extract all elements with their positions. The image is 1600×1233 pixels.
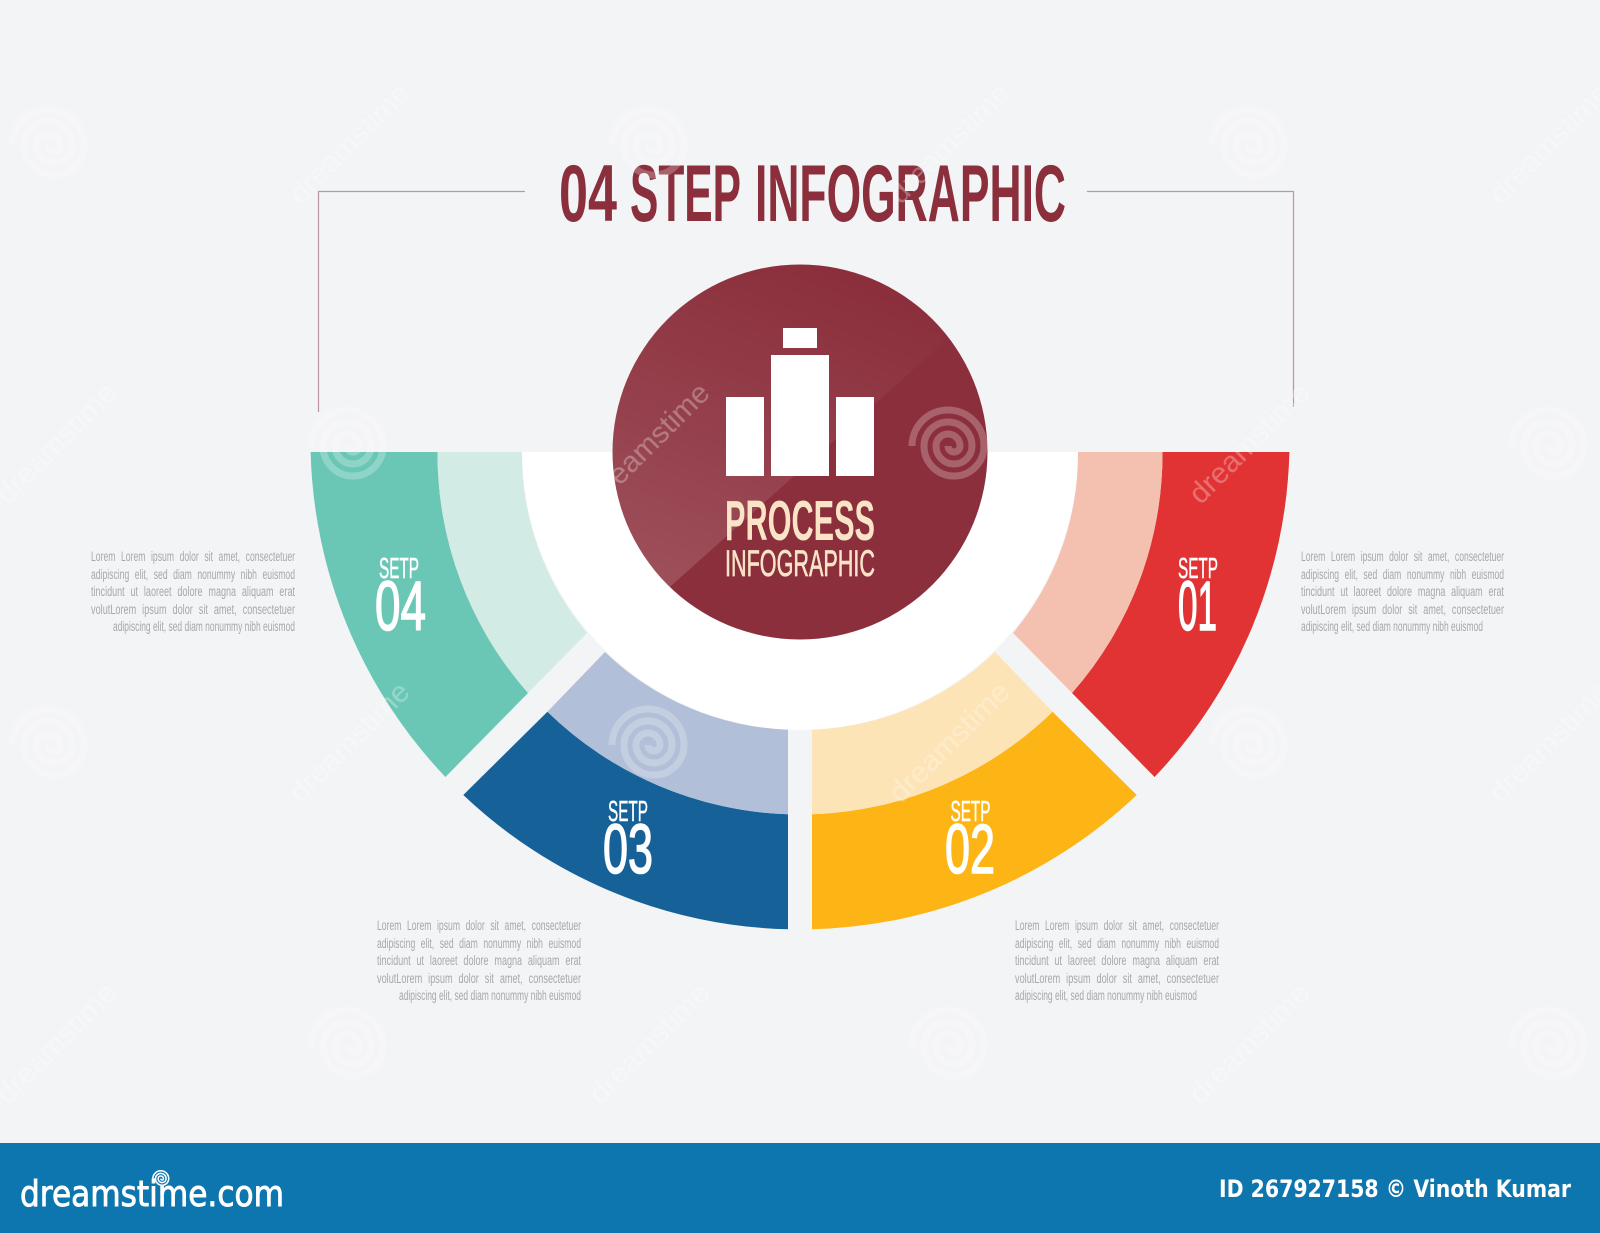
label: step 03 [603, 796, 653, 888]
footer logo spiral [153, 1171, 169, 1185]
text block: step 04: Lorem Lorem ipsum dolor sit amet, consectetuer [91, 549, 295, 564]
segment: step 01 red [1013, 452, 1289, 777]
watermark text: dreamstime [1182, 376, 1316, 510]
white inner half disc [522, 452, 1078, 730]
text block: step 01 [1301, 549, 1504, 634]
watermark text: dreamstime [582, 976, 716, 1110]
text block: step 01: volutLorem ipsum dolor sit amet, consectetuer [1301, 602, 1504, 617]
text block: step 01: tincidunt ut laoreet dolore magna aliquam erat [1301, 584, 1504, 599]
title [559, 149, 1066, 239]
title: STEP [630, 149, 741, 239]
watermark text: dreamstime [882, 675, 1016, 809]
segment: step 03 blue [463, 652, 788, 929]
text block: step 01: adipiscing elit, sed diam nonummy nibh euismod [1301, 619, 1483, 634]
footer logo: dreamstime.com [20, 1174, 284, 1215]
text block: step 03: adipiscing elit, sed diam nonummy nibh euismod [399, 988, 581, 1003]
icon: bar chart podium [726, 328, 874, 476]
title: INFOGRAPHIC [755, 149, 1066, 239]
text block: step 04: volutLorem ipsum dolor sit amet, consectetuer [91, 602, 295, 617]
text block: step 02: adipiscing elit, sed diam nonummy nibh euismod [1015, 988, 1197, 1003]
watermark text: dreamstime [282, 675, 416, 809]
watermark text: dreamstime [582, 376, 716, 510]
label: step 02: 02 [945, 810, 995, 888]
label: step 04 [375, 553, 426, 645]
label: step 04: 04 [375, 567, 426, 645]
text block: step 04: tincidunt ut laoreet dolore magna aliquam erat [91, 584, 295, 599]
label: step 02 [945, 796, 995, 888]
text block: step 03 [377, 918, 581, 1003]
watermark text: dreamstime [282, 76, 416, 210]
footer bar [0, 1143, 1600, 1233]
text block: step 03: Lorem Lorem ipsum dolor sit amet, consectetuer [377, 918, 581, 933]
text block: step 03: volutLorem ipsum dolor sit amet, consectetuer [377, 971, 581, 986]
centre label: PROCESS [725, 489, 875, 553]
text block: step 02: adipiscing elit, sed diam nonummy nibh euismod [1015, 936, 1219, 951]
segment: step 04 teal [311, 452, 587, 777]
segment: step 02 yellow [812, 652, 1137, 929]
text block: step 04: adipiscing elit, sed diam nonummy nibh euismod [113, 619, 295, 634]
label: step 01: SETP [1178, 553, 1218, 585]
text block: step 02: tincidunt ut laoreet dolore magna aliquam erat [1015, 953, 1219, 968]
text block: step 03: adipiscing elit, sed diam nonummy nibh euismod [377, 936, 581, 951]
text block: step 03: tincidunt ut laoreet dolore magna aliquam erat [377, 953, 581, 968]
label: step 03: 03 [603, 810, 653, 888]
label: step 01 [1178, 553, 1218, 645]
label: step 04: SETP [379, 553, 419, 585]
text block: step 02: Lorem Lorem ipsum dolor sit amet, consectetuer [1015, 918, 1219, 933]
text block: step 02 [1015, 918, 1219, 1003]
watermark text: dreamstime [882, 76, 1016, 210]
text block: step 02: volutLorem ipsum dolor sit amet, consectetuer [1015, 971, 1219, 986]
label: step 01: 01 [1178, 567, 1217, 645]
text block: step 04 [91, 549, 295, 634]
centre label: INFOGRAPHIC [725, 543, 875, 584]
title bracket lines [318, 192, 1294, 412]
centre circle [610, 264, 988, 640]
label: step 03: SETP [608, 796, 648, 828]
title: 04 [559, 149, 617, 239]
label: step 02: SETP [950, 796, 990, 828]
centre label [725, 489, 875, 584]
watermark spirals [12, 109, 1584, 1076]
text block: step 04: adipiscing elit, sed diam nonummy nibh euismod [91, 567, 295, 582]
watermark text: dreamstime [1182, 976, 1316, 1110]
